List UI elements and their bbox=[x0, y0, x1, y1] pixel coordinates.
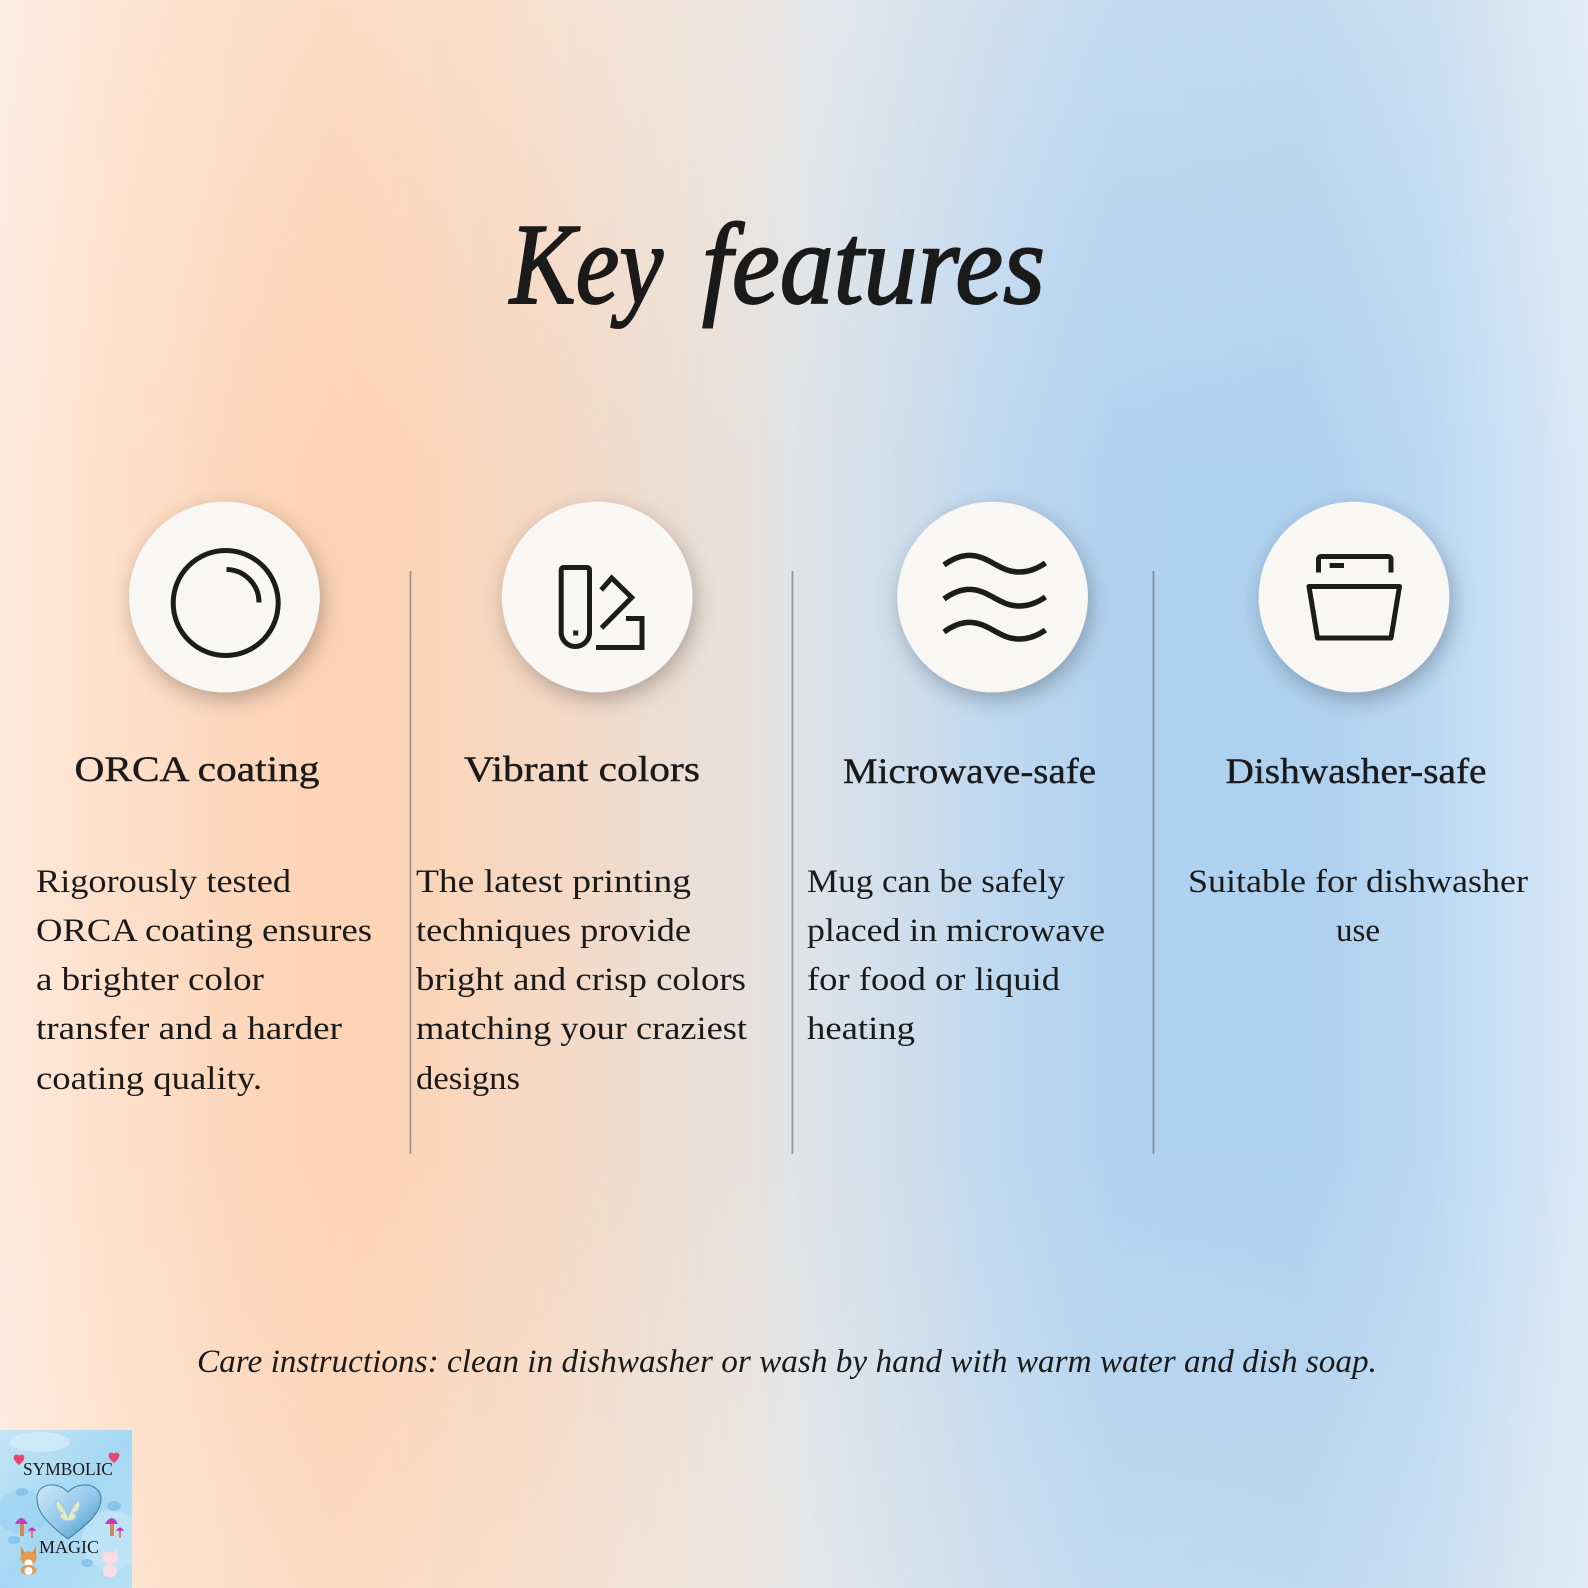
logo corgi bbox=[20, 1546, 36, 1575]
icon: coating circle bbox=[129, 502, 320, 692]
body text: ORCA coating: ORCA coating ensures bbox=[36, 913, 372, 949]
body text: ORCA coating: coating quality. bbox=[36, 1061, 262, 1097]
heading: Dishwasher-safe: Dishwasher-safe bbox=[1226, 751, 1486, 791]
title: Key bbox=[508, 201, 663, 329]
care instructions: Care instructions: clean in dishwasher or wash by hand with warm water and dish soap. bbox=[197, 1344, 1377, 1380]
body text: Dishwasher-safe: use bbox=[1336, 913, 1380, 949]
heading: Microwave-safe: Microwave-safe bbox=[843, 751, 1096, 791]
icon: color swatch bbox=[502, 502, 692, 692]
body text: ORCA coating bbox=[36, 864, 372, 1097]
logo text: SYMBOLIC bbox=[23, 1459, 113, 1479]
body text: ORCA coating: transfer and a harder bbox=[36, 1011, 342, 1047]
body text: Microwave-safe bbox=[807, 864, 1105, 1047]
logo butterfly bbox=[56, 1501, 80, 1521]
title bbox=[508, 201, 1045, 329]
body text: Microwave-safe: for food or liquid bbox=[807, 962, 1061, 998]
dividers bbox=[410, 571, 1154, 1154]
icon: dishwasher bbox=[1259, 502, 1449, 692]
body text: Microwave-safe: heating bbox=[807, 1011, 915, 1047]
logo heart bbox=[37, 1485, 101, 1539]
body text: Microwave-safe: Mug can be safely bbox=[807, 864, 1066, 900]
body text: Vibrant colors bbox=[416, 864, 747, 1097]
body text: Vibrant colors: techniques provide bbox=[416, 913, 691, 949]
body text: Vibrant colors: matching your craziest bbox=[416, 1011, 747, 1047]
logo mushrooms bbox=[15, 1518, 124, 1538]
body text: Vibrant colors: designs bbox=[416, 1061, 520, 1097]
body text: Vibrant colors: bright and crisp colors bbox=[416, 962, 746, 998]
logo text: MAGIC bbox=[39, 1537, 99, 1557]
title: features bbox=[702, 201, 1045, 329]
logo: Symbolic Magic bbox=[0, 1430, 142, 1588]
body text: Vibrant colors: The latest printing bbox=[416, 864, 691, 900]
body text: Dishwasher-safe bbox=[1188, 864, 1528, 949]
logo leaves bbox=[8, 1488, 121, 1567]
panel: Dishwasher-safe bbox=[1188, 502, 1528, 949]
heading: ORCA coating: ORCA coating bbox=[74, 749, 320, 789]
body text: ORCA coating: Rigorously tested bbox=[36, 864, 292, 900]
logo text bbox=[23, 1459, 113, 1557]
panel: ORCA coating bbox=[36, 502, 372, 1097]
panel: Vibrant colors bbox=[416, 502, 747, 1097]
body text: Microwave-safe: placed in microwave bbox=[807, 913, 1105, 949]
logo small hearts bbox=[14, 1452, 119, 1465]
body text: Dishwasher-safe: Suitable for dishwasher bbox=[1188, 864, 1528, 900]
panel: Microwave-safe bbox=[807, 502, 1105, 1047]
icon: microwave waves bbox=[897, 502, 1088, 692]
body text: ORCA coating: a brighter color bbox=[36, 962, 264, 998]
heading: Vibrant colors: Vibrant colors bbox=[464, 749, 700, 789]
logo cat bbox=[102, 1548, 118, 1578]
